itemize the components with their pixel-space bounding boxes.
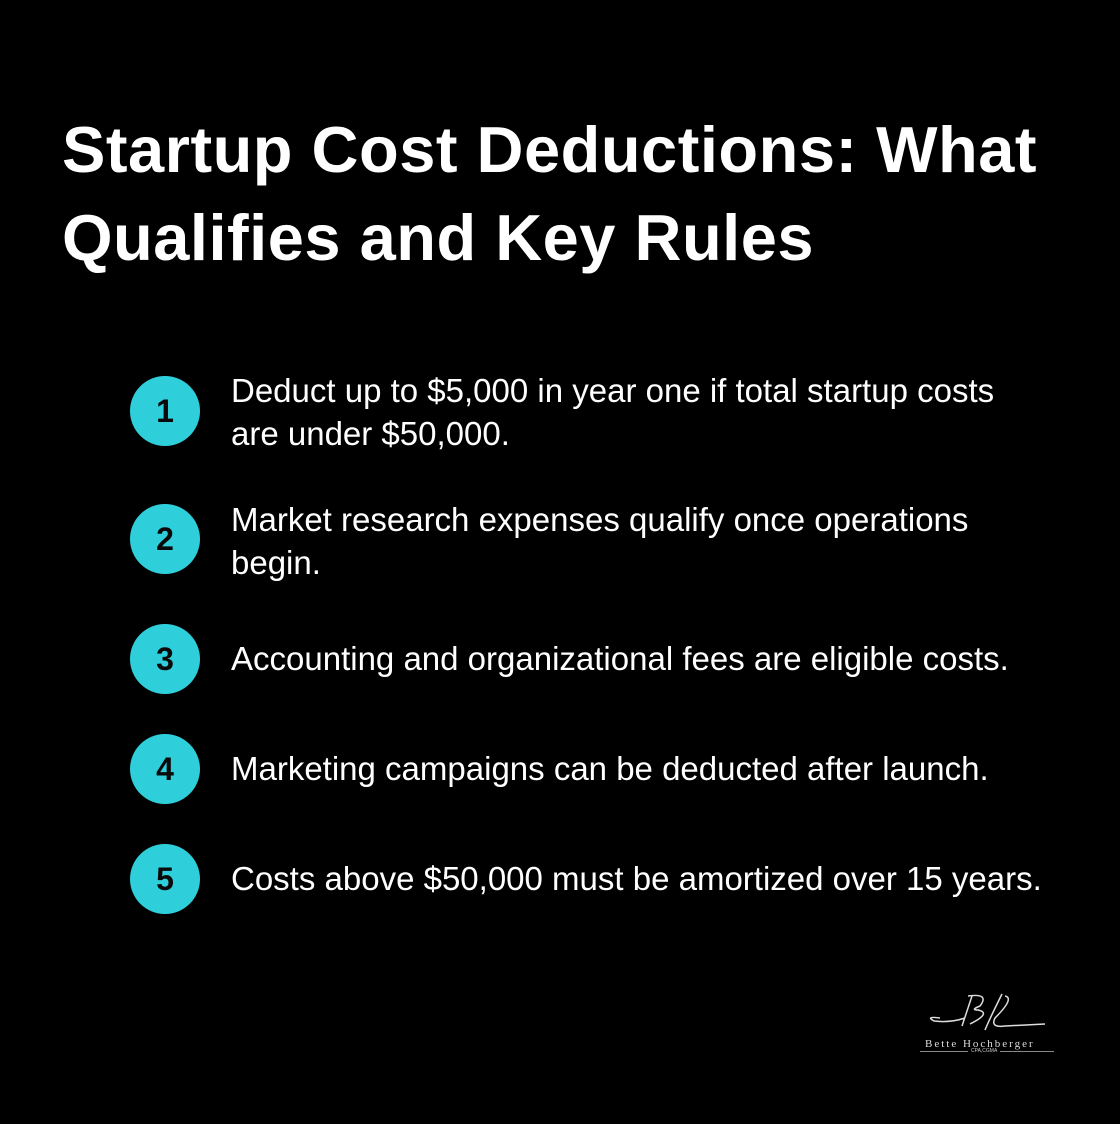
circle 5 <box>130 844 200 914</box>
circle 3: 3 <box>156 641 174 677</box>
title <box>62 113 1037 274</box>
text 2 <box>231 501 968 581</box>
text 2: Market research expenses qualify once operations <box>231 501 968 538</box>
circle 4: 4 <box>156 751 174 787</box>
circle 5: 5 <box>156 861 174 897</box>
text 1: are under $50,000. <box>231 415 510 452</box>
text 4: Marketing campaigns can be deducted after launch. <box>231 750 989 787</box>
text 5: Costs above $50,000 must be amortized over 15 years. <box>231 860 1042 897</box>
item 2 <box>130 501 968 581</box>
circle 3 <box>130 624 200 694</box>
circle 4 <box>130 734 200 804</box>
logo: CPA,CGMA <box>971 1048 997 1054</box>
text 2: begin. <box>231 544 321 581</box>
circle 2 <box>130 504 200 574</box>
circle 1: 1 <box>156 393 174 429</box>
circle 2: 2 <box>156 521 174 557</box>
item 3 <box>130 624 1009 694</box>
text 3: Accounting and organizational fees are eligible costs. <box>231 640 1009 677</box>
logo: Bette Hochberger <box>925 1038 1035 1050</box>
item 1 <box>130 372 994 452</box>
title: Qualifies and Key Rules <box>62 201 814 274</box>
item 5 <box>130 844 1042 914</box>
text 1 <box>231 372 994 452</box>
circle 1 <box>130 376 200 446</box>
title: Startup Cost Deductions: What <box>62 113 1037 186</box>
logo <box>920 994 1054 1054</box>
text 1: Deduct up to $5,000 in year one if total startup costs <box>231 372 994 409</box>
item 4 <box>130 734 989 804</box>
